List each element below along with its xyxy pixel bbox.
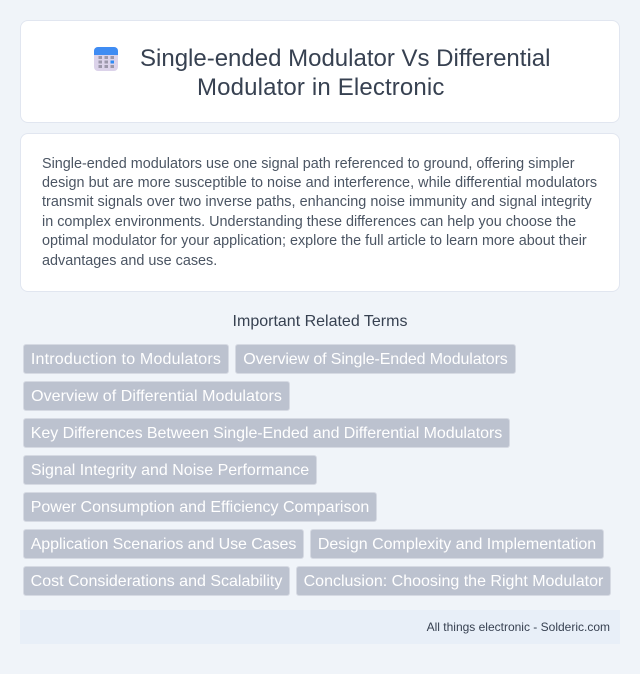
tag: Overview of Differential Modulators [31, 388, 282, 405]
section heading: Important Related Terms [233, 313, 407, 330]
description text: transmit signals over two inverse paths, enhancing noise immunity and signal integrity [42, 194, 592, 210]
description text [42, 156, 597, 268]
description text: in complex environments. Understanding these differences can help you choose the [42, 214, 576, 230]
tag [235, 344, 516, 374]
tag: Power Consumption and Efficiency Comparison [31, 499, 369, 516]
tag: Overview of Single-Ended Modulators [243, 351, 508, 368]
tag [23, 381, 290, 411]
term tags [23, 344, 611, 596]
tag [23, 344, 229, 374]
panel: description [20, 133, 620, 292]
tag [23, 566, 290, 596]
tag: Design Complexity and Implementation [318, 536, 596, 553]
tag: Key Differences Between Single-Ended and Differential Modulators [31, 425, 502, 442]
description text: advantages and use cases. [42, 252, 217, 268]
tag: Signal Integrity and Noise Performance [31, 462, 309, 479]
footer: All things electronic - Solderic.com [427, 620, 610, 634]
tag [296, 566, 611, 596]
tag [23, 455, 317, 485]
icon: calendar [94, 47, 118, 71]
title: Modulator in Electronic [197, 74, 445, 101]
tag [23, 492, 377, 522]
tag: Cost Considerations and Scalability [31, 573, 282, 590]
tag [310, 529, 604, 559]
description text: design but are more susceptible to noise and interference, while differential modulators [42, 175, 597, 191]
footer [20, 610, 620, 644]
tag [23, 529, 304, 559]
title: Single-ended Modulator Vs Differential [140, 45, 550, 72]
description text: optimal modulator for your application; explore the full article to learn more about their [42, 233, 587, 249]
title [140, 45, 550, 101]
description text: Single-ended modulators use one signal path referenced to ground, offering simpler [42, 156, 575, 172]
tag: Introduction to Modulators [31, 351, 221, 368]
tag [23, 418, 510, 448]
panel: header [20, 20, 620, 123]
tag: Conclusion: Choosing the Right Modulator [304, 573, 603, 590]
tag: Application Scenarios and Use Cases [31, 536, 296, 553]
